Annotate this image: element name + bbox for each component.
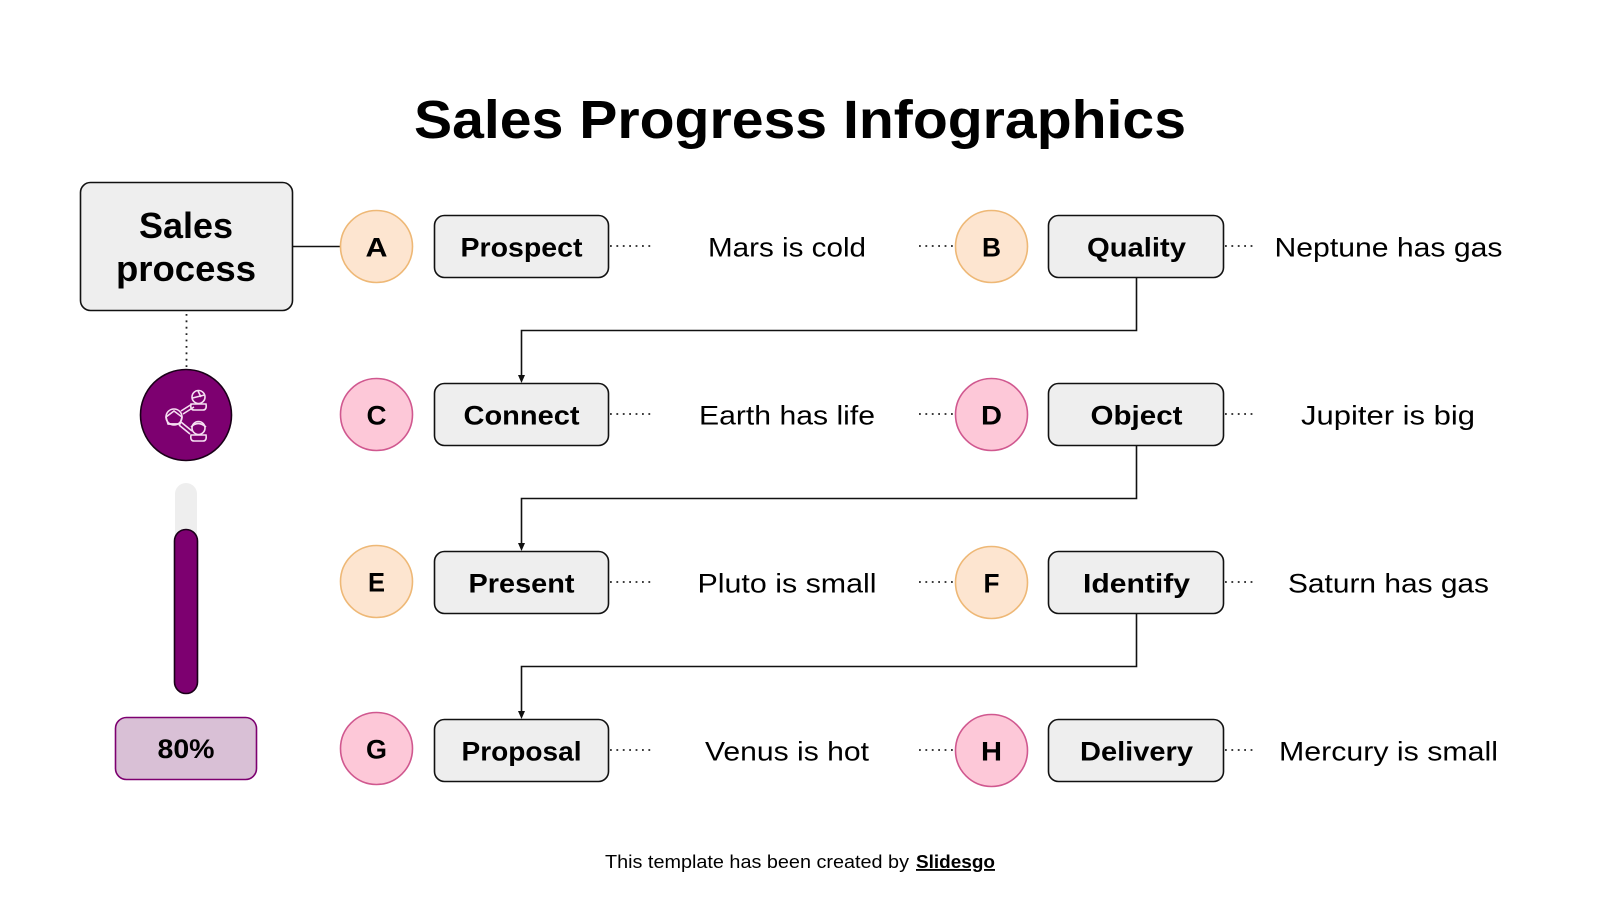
text Saturn: Saturn has gas (1288, 568, 1489, 598)
step H (956, 714, 1028, 786)
text Venus: Venus is hot (705, 736, 870, 766)
text Earth: Earth has life (699, 400, 875, 430)
step G (340, 712, 412, 784)
connector: sales box to A (293, 246, 340, 248)
label Connect: Connect (464, 400, 580, 430)
dotted leader (1225, 413, 1255, 415)
step G: G (366, 734, 387, 764)
panel: sales process: Sales (139, 205, 233, 246)
progress value (116, 718, 256, 780)
label Proposal: Proposal (462, 736, 582, 766)
row C D (340, 378, 1475, 450)
text Mars: Mars is cold (708, 232, 866, 262)
arrow: Identify to Proposal (518, 614, 1136, 719)
row G H (340, 712, 1498, 786)
footer credit: Slidesgo (916, 851, 995, 872)
arrow: Object to Present (518, 446, 1136, 551)
panel: sales process: process (116, 248, 256, 289)
text Mercury: Mercury is small (1279, 736, 1498, 766)
label Delivery (1048, 720, 1224, 782)
dotted leader (610, 581, 653, 583)
dotted leader (919, 749, 955, 751)
dotted leader (610, 245, 653, 247)
step D (956, 378, 1028, 450)
row A B (340, 210, 1502, 282)
footer credit: This template has been created by (605, 851, 910, 872)
arrow: Quality to Connect (518, 278, 1136, 383)
dotted leader (919, 581, 955, 583)
text Neptune: Neptune has gas (1274, 232, 1502, 262)
dotted leader (1225, 749, 1255, 751)
dotted leader (610, 749, 653, 751)
label Delivery: Delivery (1080, 736, 1193, 766)
label Present (434, 552, 608, 614)
step F: F (984, 568, 1000, 598)
dotted leader (919, 413, 955, 415)
dotted leader (1225, 245, 1255, 247)
step C (340, 378, 412, 450)
progress value: 80% (158, 734, 214, 764)
dotted leader (919, 245, 955, 247)
label Identify (1048, 552, 1224, 614)
title: Sales Progress Infographics (414, 90, 1186, 150)
step A (340, 210, 412, 282)
step E (340, 546, 412, 618)
progress bar (174, 483, 198, 694)
label Prospect: Prospect (460, 232, 583, 262)
step H: H (981, 736, 1002, 766)
step C: C (366, 400, 386, 430)
dotted connector: sales box to icon (186, 314, 188, 369)
text Jupiter: Jupiter is big (1301, 400, 1475, 430)
panel: sales process (80, 182, 292, 310)
icon: people network (140, 370, 232, 460)
row E F (340, 546, 1489, 618)
dotted leader (1225, 581, 1255, 583)
label Proposal (434, 720, 608, 782)
text Pluto: Pluto is small (698, 568, 876, 598)
label Connect (434, 384, 608, 446)
step B (956, 210, 1028, 282)
label Quality (1048, 216, 1224, 278)
label Quality: Quality (1087, 232, 1186, 262)
label Object (1048, 384, 1224, 446)
step D: D (981, 400, 1002, 430)
label Present: Present (468, 568, 574, 598)
step A: A (366, 232, 388, 262)
dotted leader (610, 413, 653, 415)
label Object: Object (1090, 400, 1182, 430)
step E: E (368, 568, 385, 598)
step F (956, 546, 1028, 618)
step B: B (982, 232, 1001, 262)
label Identify: Identify (1083, 568, 1190, 598)
label Prospect (434, 216, 608, 278)
